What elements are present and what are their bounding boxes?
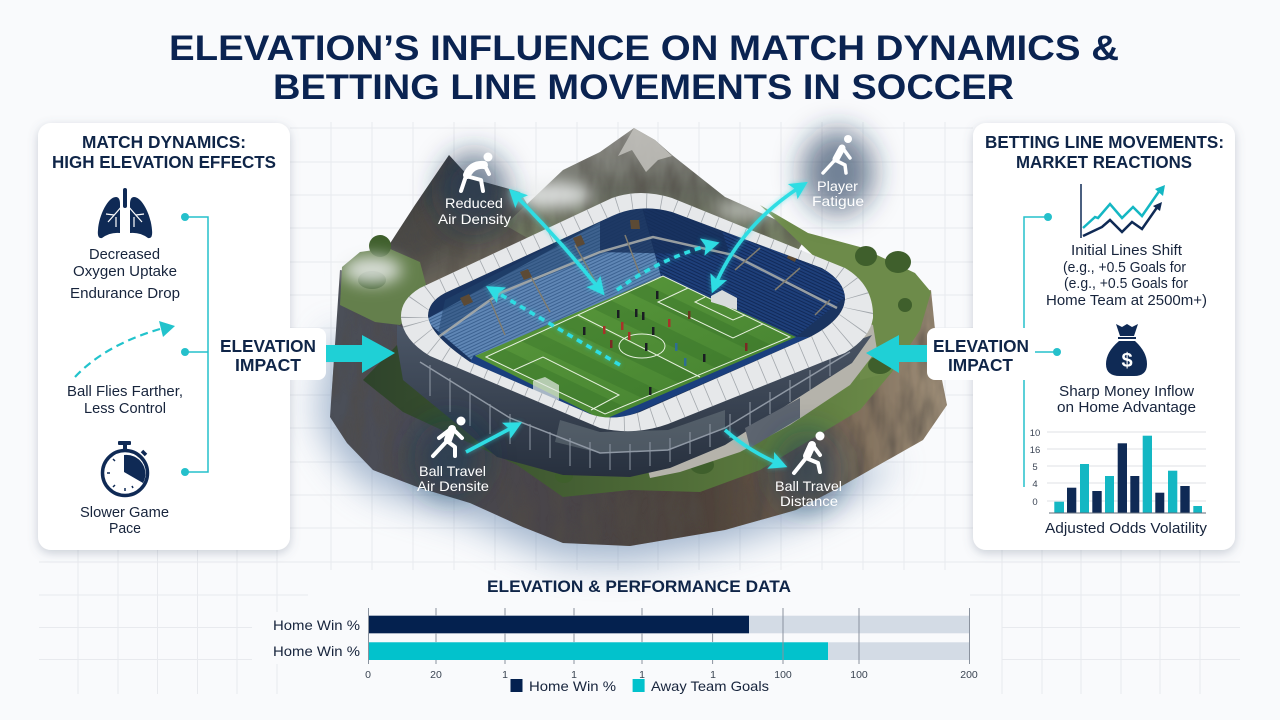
arrow: ball travel distance bbox=[725, 430, 782, 465]
tab: elevation impact left bbox=[220, 328, 326, 380]
mountain snow cap bbox=[618, 128, 672, 172]
stands bowl bbox=[428, 208, 845, 418]
arrows over stadium bbox=[466, 185, 803, 465]
text: slower game pace bbox=[80, 505, 169, 537]
icon: lungs bbox=[98, 188, 152, 238]
football pitch bbox=[475, 276, 796, 420]
icon: money bag bbox=[1106, 324, 1147, 376]
label: ball travel air densite bbox=[417, 463, 489, 494]
label: reduced air density: Air Density bbox=[438, 211, 511, 227]
panel heading bbox=[52, 132, 276, 172]
lower grass band bbox=[363, 320, 892, 497]
text: decreased oxygen uptake: Endurance Drop bbox=[70, 286, 180, 302]
arrow: dashed ball flight right bbox=[617, 244, 714, 290]
bar chart: performance: 0 bbox=[365, 669, 371, 681]
text: ball flies farther: Less Control bbox=[84, 401, 166, 417]
text: decreased oxygen uptake: Decreased bbox=[89, 247, 160, 263]
stadium facade bbox=[397, 325, 872, 477]
building wall block bbox=[745, 398, 800, 448]
icon: ball travel air figure bbox=[433, 416, 466, 456]
title: BETTING LINE MOVEMENTS IN SOCCER bbox=[273, 68, 1014, 107]
bar chart: performance: 1 bbox=[571, 669, 577, 681]
bar chart: performance: Home Win % bbox=[273, 643, 360, 659]
bar chart: performance: Home Win % bbox=[273, 617, 360, 633]
text: sharp money inflow bbox=[1057, 384, 1196, 416]
label: ball travel air densite: Ball Travel bbox=[419, 463, 486, 479]
arrow: dashed ball flight left bbox=[491, 289, 620, 365]
panel heading bbox=[985, 132, 1224, 172]
bar chart: adjusted odds volatility: 0 bbox=[1032, 497, 1038, 508]
text: initial lines shift: (e.g., +0.5 Goals for bbox=[1063, 260, 1186, 276]
label: player fatigue bbox=[812, 178, 864, 209]
bar chart: performance: 1 bbox=[502, 669, 508, 681]
trees bbox=[358, 235, 912, 483]
text: slower game pace: Slower Game bbox=[80, 505, 169, 521]
icon: player fatigue figure bbox=[823, 135, 852, 173]
panel: match dynamics bbox=[38, 123, 326, 550]
blue shadow under island bbox=[318, 330, 900, 563]
label: ball travel distance: Distance bbox=[780, 493, 838, 509]
text: adjusted odds volatility: Adjusted Odds Volatility bbox=[1045, 521, 1208, 537]
bar chart: adjusted odds volatility: 4 bbox=[1032, 479, 1038, 490]
arrow: elevation impact right bbox=[866, 335, 927, 373]
text: ball flies farther: Ball Flies Farther, bbox=[67, 384, 183, 400]
text: initial lines shift bbox=[1046, 243, 1207, 309]
arrow: reduced air density bbox=[513, 193, 601, 291]
icon: reduced air density figure bbox=[461, 152, 492, 191]
tab: elevation impact right bbox=[927, 328, 1035, 380]
bar chart: adjusted odds volatility: 5 bbox=[1032, 462, 1038, 473]
title bbox=[169, 29, 1119, 107]
right grass terrace bbox=[760, 205, 931, 380]
label: ball travel distance bbox=[775, 478, 842, 509]
bar chart: performance: 1 bbox=[639, 669, 645, 681]
bar chart: adjusted odds volatility bbox=[1030, 428, 1206, 513]
panel heading: BETTING LINE MOVEMENTS: bbox=[985, 132, 1224, 152]
bar chart: adjusted odds volatility: 16 bbox=[1030, 445, 1040, 456]
icon: line chart bbox=[1081, 184, 1165, 238]
stadium plinth bbox=[640, 320, 877, 478]
bar chart: performance: 200 bbox=[960, 669, 978, 681]
text: initial lines shift: (e.g., +0.5 Goals for bbox=[1064, 276, 1188, 292]
label glows bbox=[414, 130, 874, 510]
panel heading: MARKET REACTIONS bbox=[1016, 152, 1192, 172]
arrow: player fatigue bbox=[714, 185, 803, 288]
icon: ball travel distance figure bbox=[794, 432, 824, 473]
label: ball travel air densite: Air Densite bbox=[417, 478, 489, 494]
icon: stopwatch bbox=[102, 441, 148, 496]
stadium roof ring bbox=[401, 193, 873, 431]
title: ELEVATION’S INFLUENCE ON MATCH DYNAMICS & bbox=[169, 29, 1119, 68]
tab: elevation impact right: ELEVATION bbox=[933, 336, 1029, 356]
label: player fatigue: Fatigue bbox=[812, 193, 864, 209]
text: decreased oxygen uptake bbox=[70, 247, 180, 302]
left grass terrace bbox=[340, 248, 430, 325]
label: reduced air density bbox=[438, 195, 511, 227]
icon: money bag: $ bbox=[1121, 350, 1133, 372]
goals bbox=[711, 290, 737, 310]
tab: elevation impact right: IMPACT bbox=[948, 355, 1013, 375]
bar chart: performance: 1 bbox=[710, 669, 716, 681]
central mountain bbox=[505, 128, 808, 280]
panel heading: MATCH DYNAMICS: bbox=[82, 132, 246, 152]
legend: Away Team Goals bbox=[651, 678, 769, 694]
tab: elevation impact left: ELEVATION bbox=[220, 336, 316, 356]
bar chart: performance: 20 bbox=[430, 669, 442, 681]
text: initial lines shift: Initial Lines Shift bbox=[1071, 243, 1182, 259]
bar chart: performance: 100 bbox=[774, 669, 792, 681]
bar chart: performance bbox=[273, 608, 978, 681]
connector bracket right bbox=[1024, 213, 1052, 487]
icon: ball flight dashed arrow bbox=[75, 321, 175, 377]
bar chart: performance: 100 bbox=[850, 669, 868, 681]
panel: betting line movements bbox=[927, 123, 1235, 550]
background grid bbox=[39, 122, 1240, 694]
legend: Home Win % bbox=[529, 678, 616, 694]
connector stub to money bag bbox=[1035, 348, 1061, 356]
left mountain bbox=[378, 155, 566, 320]
label: player fatigue: Player bbox=[817, 178, 858, 194]
text: slower game pace: Pace bbox=[109, 521, 141, 537]
island cliffs bbox=[330, 270, 947, 546]
panel heading: HIGH ELEVATION EFFECTS bbox=[52, 152, 276, 172]
bar chart: adjusted odds volatility: 10 bbox=[1030, 428, 1040, 439]
arrow: elevation impact left bbox=[326, 335, 395, 373]
players bbox=[583, 291, 748, 395]
fog bbox=[342, 181, 777, 284]
label: reduced air density: Reduced bbox=[445, 195, 503, 211]
text: initial lines shift: Home Team at 2500m+) bbox=[1046, 293, 1207, 309]
illustration: mountain stadium island bbox=[330, 128, 947, 546]
legend bbox=[510, 678, 769, 694]
heading: ELEVATION & PERFORMANCE DATA bbox=[487, 577, 791, 596]
arrow: ball travel air bbox=[466, 425, 517, 452]
label: ball travel distance: Ball Travel bbox=[775, 478, 842, 494]
text: ball flies farther bbox=[67, 384, 183, 417]
text: sharp money inflow: on Home Advantage bbox=[1057, 400, 1196, 416]
connector bracket left bbox=[181, 213, 208, 476]
text: decreased oxygen uptake: Oxygen Uptake bbox=[73, 264, 177, 280]
tab: elevation impact left: IMPACT bbox=[235, 355, 301, 375]
panel: elevation and performance data bbox=[273, 577, 978, 694]
text: sharp money inflow: Sharp Money Inflow bbox=[1059, 384, 1195, 400]
